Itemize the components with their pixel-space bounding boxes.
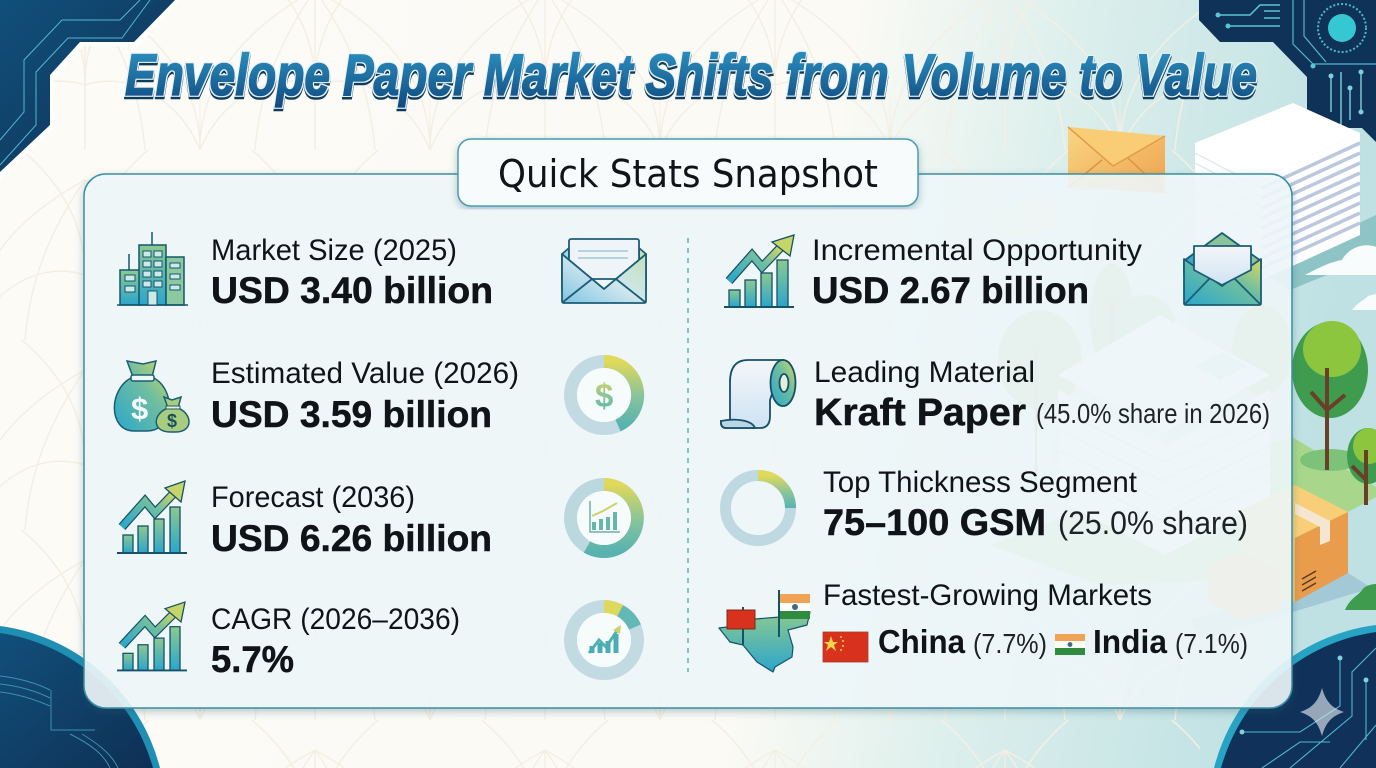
cream notes [990, 199, 1056, 236]
divider [687, 238, 689, 672]
paper stack top right [1195, 103, 1376, 290]
icon: city buildings [117, 232, 188, 305]
heading: quick stats snapshot: Quick Stats Snapshot [498, 152, 878, 196]
large tree [1292, 321, 1368, 471]
China share: (7.7%) [973, 628, 1047, 659]
stat: cagr [117, 602, 638, 680]
illustration: isometric paper, trees and boxes [990, 103, 1376, 640]
value: USD 3.59 billion [211, 394, 492, 435]
value: 5.7% [211, 639, 294, 680]
India share: (7.1%) [1175, 628, 1248, 659]
stat: top thickness segment [726, 466, 1248, 543]
China value: China [878, 623, 966, 660]
value: 75–100 GSM [823, 502, 1046, 543]
main stats panel [84, 174, 1292, 708]
icon: paper roll [721, 360, 796, 428]
small box [1208, 552, 1280, 620]
donut: growth [570, 606, 638, 674]
icon: map with flags [719, 590, 810, 672]
donut: thickness share [726, 476, 790, 540]
value: USD 6.26 billion [211, 518, 492, 559]
label: CAGR (2026–2036) [211, 603, 460, 636]
flag: China [823, 632, 868, 662]
label: Top Thickness Segment [823, 466, 1138, 499]
stat: incremental opportunity [724, 233, 1261, 311]
central paper stack [1058, 315, 1270, 555]
donut: dollar [570, 361, 638, 428]
icon: growth chart [117, 602, 187, 670]
value: Kraft Paper [814, 392, 1026, 434]
bottom-right circuit circle [1214, 625, 1376, 768]
label: Forecast (2036) [211, 481, 415, 514]
bottom-left circuit circle [0, 626, 160, 768]
orange envelope [1068, 127, 1165, 193]
value: USD 3.40 billion [211, 270, 493, 311]
India value: India [1093, 623, 1168, 660]
faint background trees [998, 263, 1292, 480]
stat: fastest-growing markets [719, 579, 1248, 672]
icon: envelope [562, 239, 646, 303]
donut: dollar: $ [595, 377, 613, 414]
stat: forecast [117, 481, 638, 559]
top-left circuit corner [0, 0, 180, 180]
donut: chart [570, 484, 638, 552]
green ground [990, 437, 1376, 585]
icon: money bags [114, 361, 189, 432]
icon: growth chart [724, 235, 794, 307]
cardboard box [1190, 485, 1372, 640]
icon: growth chart [117, 481, 187, 553]
sparkle watermark [1300, 688, 1344, 736]
stat: leading material [721, 356, 1270, 434]
teal node [1318, 4, 1366, 52]
label: Incremental Opportunity [812, 234, 1142, 267]
clouds [1305, 245, 1376, 310]
small tree [1347, 428, 1376, 505]
share note: (25.0% share) [1058, 505, 1248, 541]
icon: open envelope [1184, 233, 1261, 305]
label: Leading Material [814, 356, 1035, 389]
top-right circuit corner [1199, 0, 1376, 142]
bush [1345, 584, 1376, 610]
flag: India [1055, 634, 1085, 655]
label: Fastest-Growing Markets [823, 579, 1152, 612]
label: Market Size (2025) [211, 234, 457, 267]
share note: (45.0% share in 2026) [1036, 398, 1270, 429]
stat: market size [117, 232, 646, 311]
heading: quick stats snapshot [458, 139, 918, 206]
stat: estimated value [114, 357, 638, 435]
value: USD 2.67 billion [812, 270, 1089, 311]
icon: money bags: $ [167, 411, 177, 431]
label: Estimated Value (2026) [211, 357, 519, 390]
icon: money bags: $ [131, 391, 148, 426]
